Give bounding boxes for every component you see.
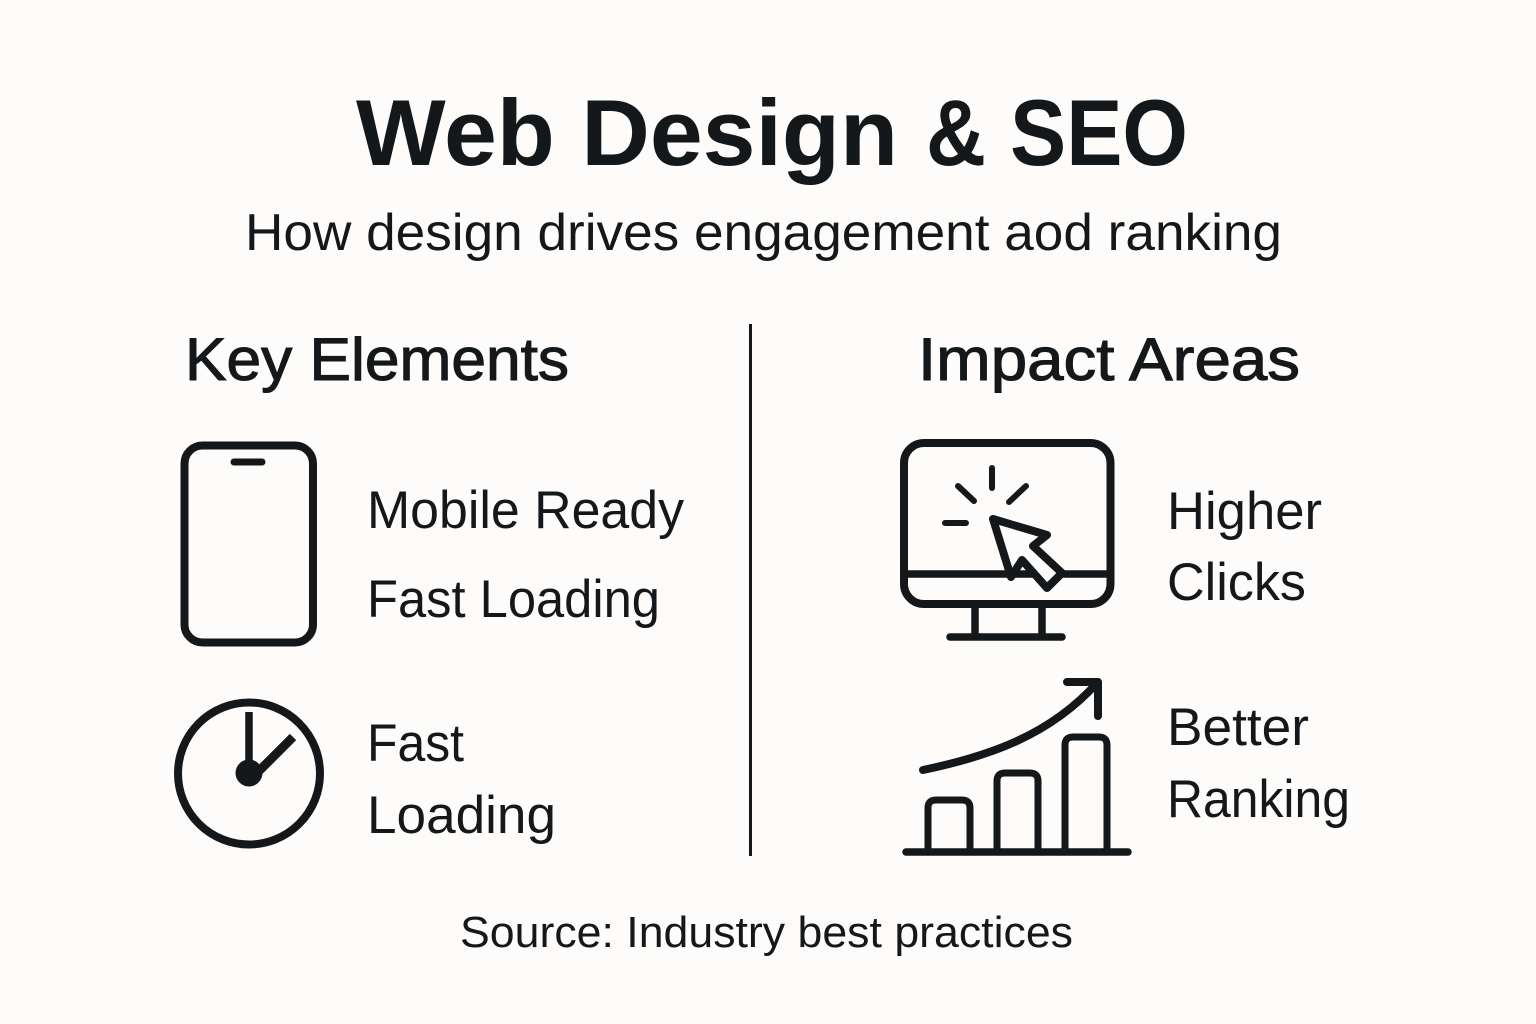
text: higher: Higher — [1167, 482, 1322, 541]
subtitle: How design drives engagement aod ranking — [245, 204, 1282, 262]
icon: clock — [178, 702, 320, 844]
text: better: Better — [1167, 698, 1309, 757]
icon: rising bar chart — [906, 682, 1128, 852]
text: clicks: Clicks — [1167, 553, 1306, 612]
title: SEO — [1010, 80, 1188, 185]
text: fast loading: Fast Loading — [367, 570, 660, 629]
heading: impact areas: Impact Areas — [918, 326, 1300, 393]
icon: monitor with cursor — [904, 443, 1110, 637]
text: mobile ready: Mobile Ready — [367, 481, 684, 540]
panel: impact areas — [904, 326, 1350, 852]
source note: Source: Industry best practices — [460, 908, 1073, 957]
title: Web Design — [356, 80, 898, 185]
panel: key elements — [178, 326, 684, 845]
text: ranking: Ranking — [1167, 770, 1350, 829]
text: fast: Fast — [367, 714, 464, 773]
title — [356, 80, 1188, 185]
text: loading: Loading — [367, 786, 556, 845]
icon: smartphone — [184, 446, 313, 642]
title: & — [926, 80, 986, 185]
heading: key elements: Key Elements — [185, 326, 569, 393]
